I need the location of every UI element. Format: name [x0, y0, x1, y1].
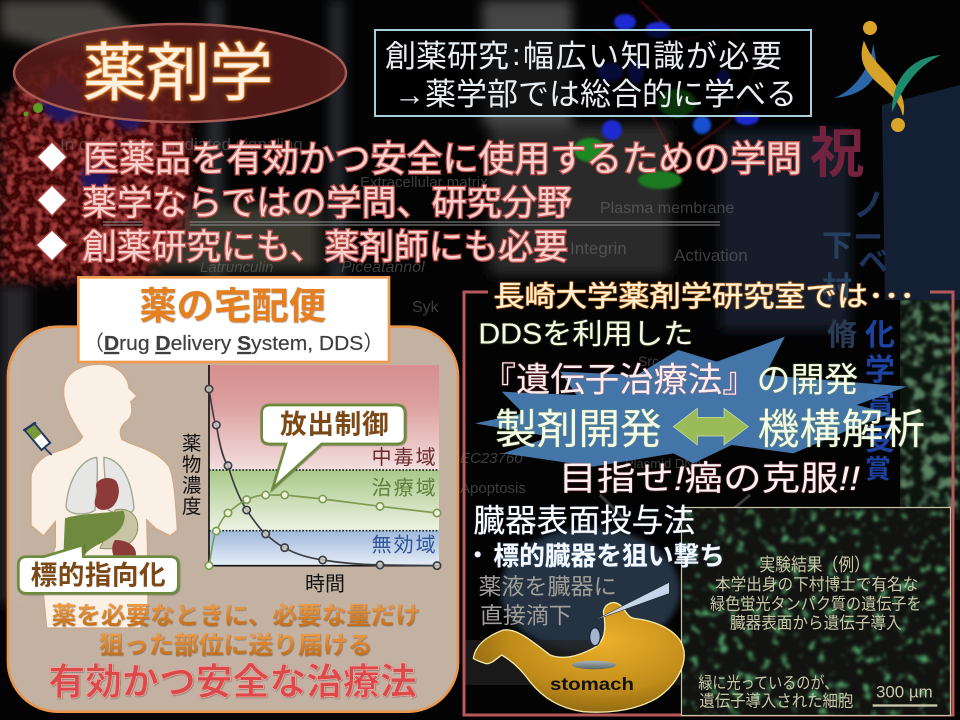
building panels and award banner right: 村 — [822, 272, 852, 305]
callout: targeting — [18, 545, 178, 593]
zone labels: 無効域 — [372, 534, 436, 557]
note box: research needs broad knowledge: : — [512, 37, 521, 72]
note box: research needs broad knowledge: →薬学部では総合的に学べる — [394, 77, 797, 112]
cell note: 緑に光っているのが、 — [698, 673, 838, 692]
method description: 薬液を臓器に — [478, 573, 617, 599]
summary text: 薬を必要なときに、必要な量だけ — [52, 602, 420, 630]
summary text — [48, 602, 420, 702]
human body silhouette — [32, 365, 177, 627]
result caption: 本学出身の下村博士で有名な — [715, 575, 918, 594]
cell note — [698, 673, 854, 711]
building panels and award banner right: ー — [853, 222, 883, 255]
title text: 薬剤学 — [83, 39, 273, 109]
y axis label: 薬 — [182, 433, 201, 455]
building panels and award banner right: 受 — [865, 424, 895, 457]
zone labels: 治療域 — [372, 477, 436, 500]
faint pathway labels: Integrin — [570, 239, 627, 258]
heading box: 薬の宅配便 — [139, 285, 326, 327]
callout: targeting: 標的指向化 — [31, 560, 166, 590]
formulation development: 製剤開発 — [495, 405, 662, 452]
development: の開発 — [757, 362, 858, 400]
stomach illustration: stomach — [550, 674, 634, 694]
note box: research needs broad knowledge — [375, 30, 811, 116]
faint pathway labels: Extracellular matrix — [360, 174, 488, 191]
summary text: 狙った部位に送り届ける — [99, 631, 373, 659]
summary text: 有効かつ安全な治療法 — [48, 661, 417, 702]
method description — [478, 573, 617, 628]
building panels and award banner right: ノ — [853, 187, 885, 223]
callout: controlled release: 放出制御 — [280, 409, 389, 439]
cell image left (red) — [0, 57, 190, 280]
y axis label: 度 — [182, 496, 201, 518]
bullet list — [36, 138, 802, 267]
bullet 1: 医薬品を有効かつ安全に使用するための学問 — [83, 138, 802, 179]
faint pathway labels: In cell matrix-mediated signaling — [60, 135, 303, 154]
x axis label: 時間 — [305, 573, 345, 596]
heading box: Drug Delivery System, DDS — [104, 332, 363, 355]
icon: syringe — [23, 423, 52, 455]
title ellipse — [14, 24, 346, 122]
DDS line: DDSを利用した — [478, 318, 693, 350]
method heading: 臓器表面投与法 — [473, 503, 695, 539]
blue burst shape — [475, 337, 907, 467]
y axis label: 濃 — [182, 475, 201, 497]
faint pathway labels: Piceatannol — [341, 259, 425, 276]
faint pathway labels: Apoptosis — [460, 480, 526, 497]
panel: drug delivery system — [8, 277, 458, 712]
faint pathway labels: Syk — [412, 299, 440, 316]
result caption: 実験結果（例） — [759, 555, 870, 575]
heading box — [78, 277, 389, 362]
heading box: ） — [363, 332, 384, 355]
lower-right building arch — [465, 495, 750, 685]
scale bar: 300 µm — [876, 683, 933, 702]
building panels and award banner right: 学 — [865, 354, 895, 387]
lab heading: 長崎大学薬剤学研究室では･･･ — [493, 281, 915, 313]
organs — [63, 457, 138, 557]
bullet 2: 薬学ならではの学問、研究分野 — [82, 184, 572, 223]
method bullet: 標的臓器を狙い撃ち — [493, 541, 725, 571]
series: green curve — [205, 491, 441, 569]
heading box: （ — [83, 332, 104, 355]
logo — [834, 21, 941, 132]
faint pathway labels: Src — [638, 353, 659, 369]
scale bar — [873, 683, 937, 707]
panel bracket frame — [464, 292, 953, 715]
building panels and award banner right: 賞 — [865, 389, 895, 422]
building panels and award banner right: 賞 — [865, 454, 891, 484]
faint pathway labels: Activation — [674, 246, 748, 265]
note box: research needs broad knowledge: 創薬研究 — [385, 39, 509, 74]
building panels and award banner right: 祝 — [810, 124, 864, 184]
goal line: 目指せ!癌の克服!! — [558, 460, 861, 498]
result caption: 臓器表面から遺伝子導入 — [730, 613, 902, 632]
organ surface administration block — [473, 503, 725, 712]
bullet 3: 創薬研究にも、薬剤師にも必要 — [82, 228, 568, 267]
zone labels — [372, 446, 436, 557]
building panels and award banner right: ベ — [858, 246, 888, 279]
result caption — [710, 555, 922, 632]
arrow: double headed — [673, 408, 748, 445]
faint pathway labels: Plasma membrane — [600, 200, 734, 217]
faint pathway labels — [60, 135, 748, 497]
method description: 直接滴下 — [480, 602, 572, 628]
gene therapy line: 『遺伝子治療法』 — [482, 362, 757, 400]
faint pathway labels: EC23760 — [460, 450, 523, 467]
faint pathway labels: Latrunculin — [200, 259, 273, 276]
y axis label: 物 — [182, 454, 201, 476]
cell note: 遺伝子導入された細胞 — [699, 692, 854, 711]
mechanism analysis: 機構解析 — [758, 405, 925, 452]
experimental result photo — [682, 508, 950, 716]
chart: drug concentration over time — [182, 365, 441, 596]
note box: research needs broad knowledge: 幅広い知識が必要 — [523, 39, 782, 74]
callout: controlled release — [262, 405, 405, 488]
faint pathway labels: Plasmid DNA — [625, 456, 703, 471]
building panels and award banner right: 化 — [865, 319, 895, 352]
cell image top right (blue + green) — [574, 0, 760, 189]
building panels and award banner right: 下 — [822, 230, 852, 263]
building panels and award banner right — [810, 85, 960, 520]
stomach illustration — [473, 582, 684, 712]
zone labels: 中毒域 — [372, 446, 436, 469]
panel: nagasaki university research — [464, 281, 953, 716]
result caption: 緑色蛍光タンパク質の遺伝子を — [710, 594, 922, 613]
building panels and award banner right: 脩 — [827, 319, 857, 352]
series: black curve — [205, 385, 441, 569]
